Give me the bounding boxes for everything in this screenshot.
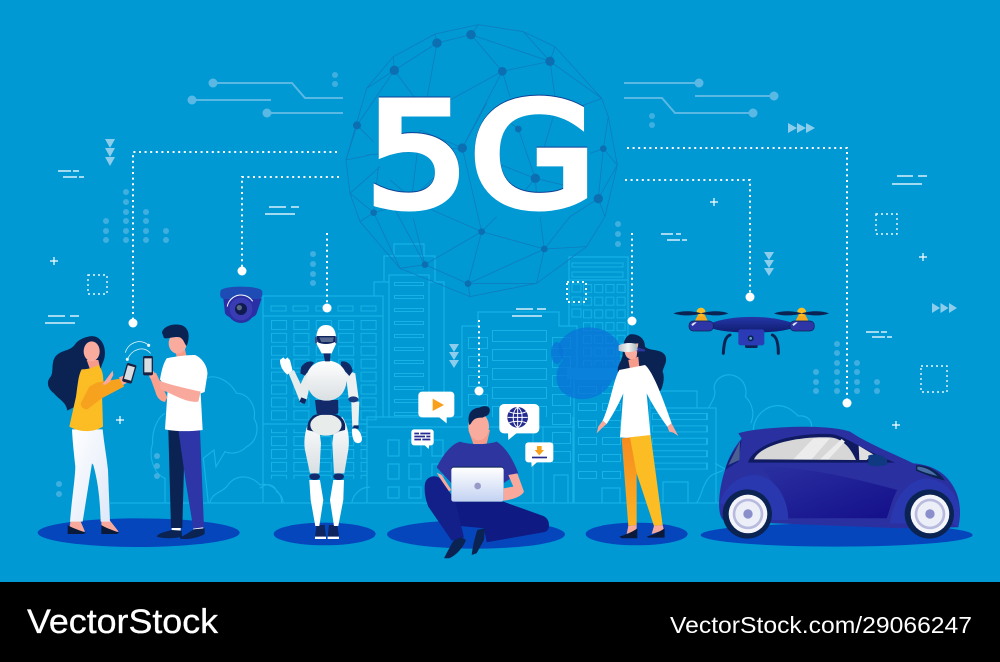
dotted squares (88, 214, 947, 392)
car windows (748, 434, 895, 463)
car shadow (701, 523, 973, 547)
connector: laptop man (474, 320, 484, 396)
globe mesh (346, 25, 617, 297)
ground line (110, 502, 760, 504)
connector: camera (238, 177, 339, 276)
tree: left (151, 377, 282, 503)
seated man (425, 406, 549, 558)
connector: VR woman (628, 233, 636, 326)
building: middle offices (462, 312, 577, 503)
circuit traces left (188, 78, 343, 118)
small dashes decor (45, 171, 927, 337)
waist (315, 400, 338, 415)
legs (309, 480, 344, 526)
feet (315, 525, 339, 537)
chest (307, 361, 347, 401)
woman with phone (48, 336, 137, 534)
neck (323, 353, 331, 361)
footer image id: VectorStock.com/29066247 (670, 612, 972, 638)
drone and car (673, 308, 973, 547)
arms (345, 370, 359, 427)
building: tower base with roof (574, 379, 716, 503)
building: low block (367, 417, 575, 503)
car (719, 427, 960, 539)
laptop man and woman in VR (387, 334, 688, 558)
title: 5G: 5G (365, 72, 596, 240)
phone data arcs (125, 342, 151, 360)
car headlight (916, 465, 945, 481)
head (316, 325, 336, 353)
pelvis (307, 414, 345, 435)
connector: people (128, 152, 337, 328)
tree: right (697, 375, 812, 503)
bubble: play (418, 392, 454, 423)
circuit traces right (624, 78, 778, 118)
drone (673, 308, 829, 353)
bubble: globe (499, 404, 539, 440)
icon: security camera (220, 287, 262, 325)
plus signs (50, 198, 927, 429)
footer bar (0, 582, 1000, 662)
bushes (260, 485, 370, 503)
triple arrows (105, 123, 957, 368)
robot (274, 325, 376, 545)
wheels (723, 489, 772, 539)
footer logo: VectorStock (27, 603, 219, 641)
people group: couple with phones (38, 325, 240, 547)
woman with VR headset (597, 334, 678, 538)
connector: robot (322, 233, 332, 312)
dot matrices (56, 72, 880, 497)
building: right tower (569, 257, 628, 366)
building: left apartment block (263, 296, 383, 503)
title: 5G: 5G (365, 70, 596, 238)
ground shadows (387, 520, 565, 549)
shoulders (300, 361, 353, 376)
ground shadow (274, 523, 376, 545)
connector: car (627, 148, 852, 408)
blue blob over buildings (551, 327, 627, 399)
building: central tower (374, 244, 444, 417)
bubble: text list (411, 429, 434, 449)
man with phone (143, 325, 207, 539)
ground shadow (38, 518, 240, 547)
bubble: download (525, 442, 553, 467)
connector: drone (625, 180, 754, 302)
city skyline outlines (110, 244, 812, 503)
